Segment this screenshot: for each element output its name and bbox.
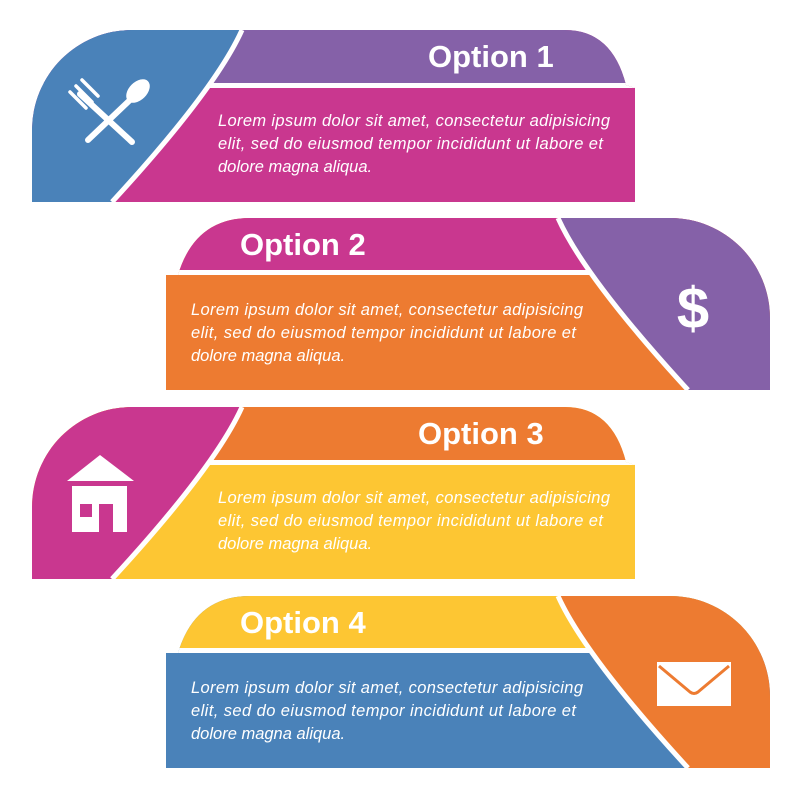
text block: option 4: Lorem ipsum dolor sit amet, consectetur adipisicing [191,679,584,697]
icon: fork and spoon [70,75,154,142]
panel: option 4 [166,596,770,768]
text block: option 1: dolore magna aliqua. [218,158,372,176]
icon: dollar: $ [677,276,709,341]
heading: option 4: Option 4 [240,605,366,640]
panel: option 3 [32,407,635,579]
text block: option 2: dolore magna aliqua. [191,347,345,365]
icon: envelope [657,662,731,706]
text block: option 4: elit, sed do eiusmod tempor incididunt ut labore et [191,702,577,720]
text block: option 4: dolore magna aliqua. [191,725,345,743]
text block: option 2: Lorem ipsum dolor sit amet, consectetur adipisicing [191,301,584,319]
text block: option 1: Lorem ipsum dolor sit amet, consectetur adipisicing [218,112,611,130]
text block: option 3: elit, sed do eiusmod tempor incididunt ut labore et [218,512,604,530]
panel: option 2 [166,218,770,390]
heading: option 1: Option 1 [428,39,554,74]
text block: option 1: elit, sed do eiusmod tempor incididunt ut labore et [218,135,604,153]
panel: option 1 [32,30,635,202]
text block: option 2: elit, sed do eiusmod tempor incididunt ut labore et [191,324,577,342]
icon: house [67,455,134,532]
heading: option 2: Option 2 [240,227,366,262]
heading: option 3: Option 3 [418,416,544,451]
text block: option 3: Lorem ipsum dolor sit amet, consectetur adipisicing [218,489,611,507]
text block: option 3: dolore magna aliqua. [218,535,372,553]
